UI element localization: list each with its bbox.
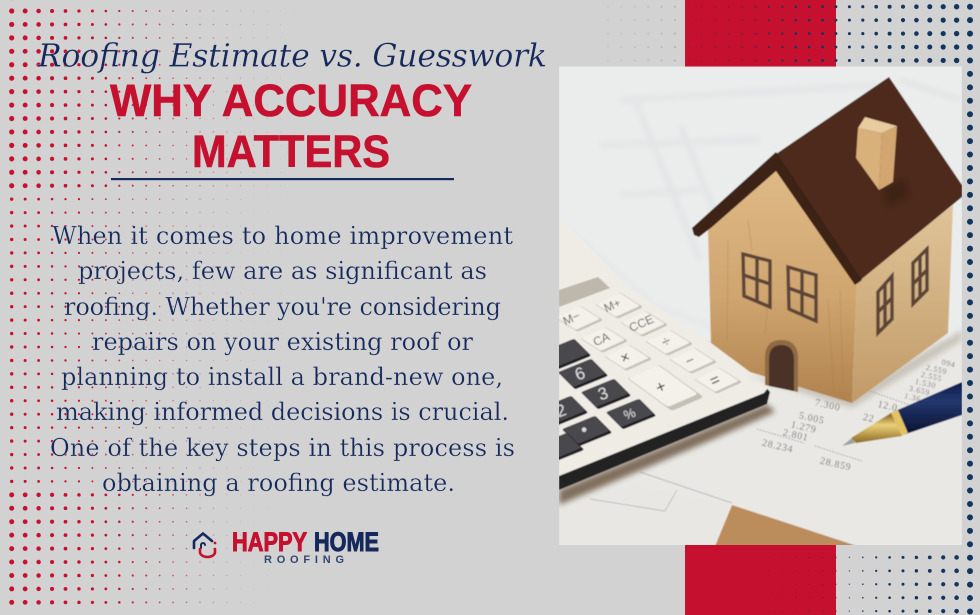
- calculator shadow: [559, 404, 775, 505]
- dark keys: 6: [572, 363, 588, 384]
- logo wordmark: HOME: [314, 527, 379, 557]
- wood grain: [727, 220, 841, 318]
- wood table: [715, 505, 857, 546]
- house side wall: [852, 205, 953, 403]
- roof front edge: [692, 152, 862, 285]
- light keys: M+: [602, 295, 623, 315]
- windows: [743, 249, 927, 333]
- dark keys: 2: [553, 400, 569, 421]
- paper figures: 094: [941, 358, 956, 370]
- paper figures: 28.234: [761, 438, 794, 455]
- body paragraph: [50, 222, 515, 497]
- paper figures: 2.555: [920, 370, 943, 383]
- pen: [842, 382, 962, 446]
- heading underline: [111, 178, 454, 180]
- body paragraph: making informed decisions is crucial.: [56, 398, 509, 426]
- heading: WHY ACCURACY: [110, 75, 472, 126]
- light keys: ×: [618, 348, 633, 367]
- body paragraph: repairs on your existing roof or: [92, 328, 474, 356]
- logo icon: [194, 534, 216, 557]
- photo: wooden house on calculator and papers: [534, 66, 962, 546]
- chimney: [856, 117, 908, 206]
- house shadow: [745, 330, 962, 408]
- light keys: +: [652, 376, 669, 398]
- halftone dots: left red field: [0, 0, 294, 615]
- red block: bottom: [685, 545, 836, 615]
- calculator: [559, 276, 770, 490]
- roof: [776, 77, 962, 282]
- paper figures: 1.530: [914, 377, 937, 390]
- paper figures: 12.0: [876, 399, 899, 414]
- dark keys: [559, 338, 656, 461]
- paper figures: 3.659: [908, 384, 931, 397]
- photo background: papers: [559, 66, 962, 546]
- body paragraph: projects, few are as significant as: [78, 257, 487, 285]
- door: [765, 340, 798, 392]
- paper figures: 7.300: [814, 397, 841, 414]
- light keys: −: [683, 351, 698, 370]
- house: [692, 77, 962, 403]
- light keys: =: [707, 371, 723, 391]
- heading: [110, 75, 472, 177]
- light keys: ÷: [659, 332, 673, 351]
- body paragraph: planning to install a brand-new one,: [61, 363, 503, 391]
- red block: top: [685, 0, 836, 67]
- light keys: CA: [591, 330, 612, 349]
- lower paper: [626, 346, 959, 540]
- logo wordmark: HAPPY: [232, 527, 307, 557]
- dark keys: %: [621, 405, 638, 423]
- title: Roofing Estimate vs. Guesswork: [37, 38, 547, 74]
- calculator display: [559, 277, 610, 307]
- body paragraph: obtaining a roofing estimate.: [102, 469, 455, 497]
- paper figures: 22: [862, 412, 875, 425]
- paper figures: 2.559: [925, 363, 948, 376]
- blurred paper table lines: [570, 80, 960, 330]
- dark keys: 3: [595, 383, 611, 404]
- paper figures: 1.279: [790, 419, 817, 436]
- halftone dots: right navy field: [608, 7, 970, 612]
- logo subline: ROOFING: [264, 554, 344, 566]
- dark keys: •: [578, 420, 590, 440]
- light keys: CCE: [627, 312, 656, 335]
- paper figures: 1.36: [903, 391, 922, 404]
- paper figures: 28.859: [819, 456, 852, 473]
- light keys: [555, 293, 742, 411]
- paper figures: 5.005: [798, 410, 825, 427]
- house front wall: [708, 168, 857, 403]
- body paragraph: roofing. Whether you're considering: [64, 293, 501, 321]
- logo wordmark: [232, 527, 379, 557]
- light keys: M−: [561, 308, 582, 328]
- paper figures: 2.801: [782, 427, 809, 444]
- body paragraph: One of the key steps in this process is: [50, 434, 515, 462]
- paper edge sheet: [719, 512, 730, 537]
- paper figures: [757, 358, 956, 473]
- sketch lines on paper: [590, 472, 732, 511]
- heading: MATTERS: [192, 126, 390, 177]
- logo: Happy Home Roofing: [194, 527, 379, 566]
- body paragraph: When it comes to home improvement: [52, 222, 513, 250]
